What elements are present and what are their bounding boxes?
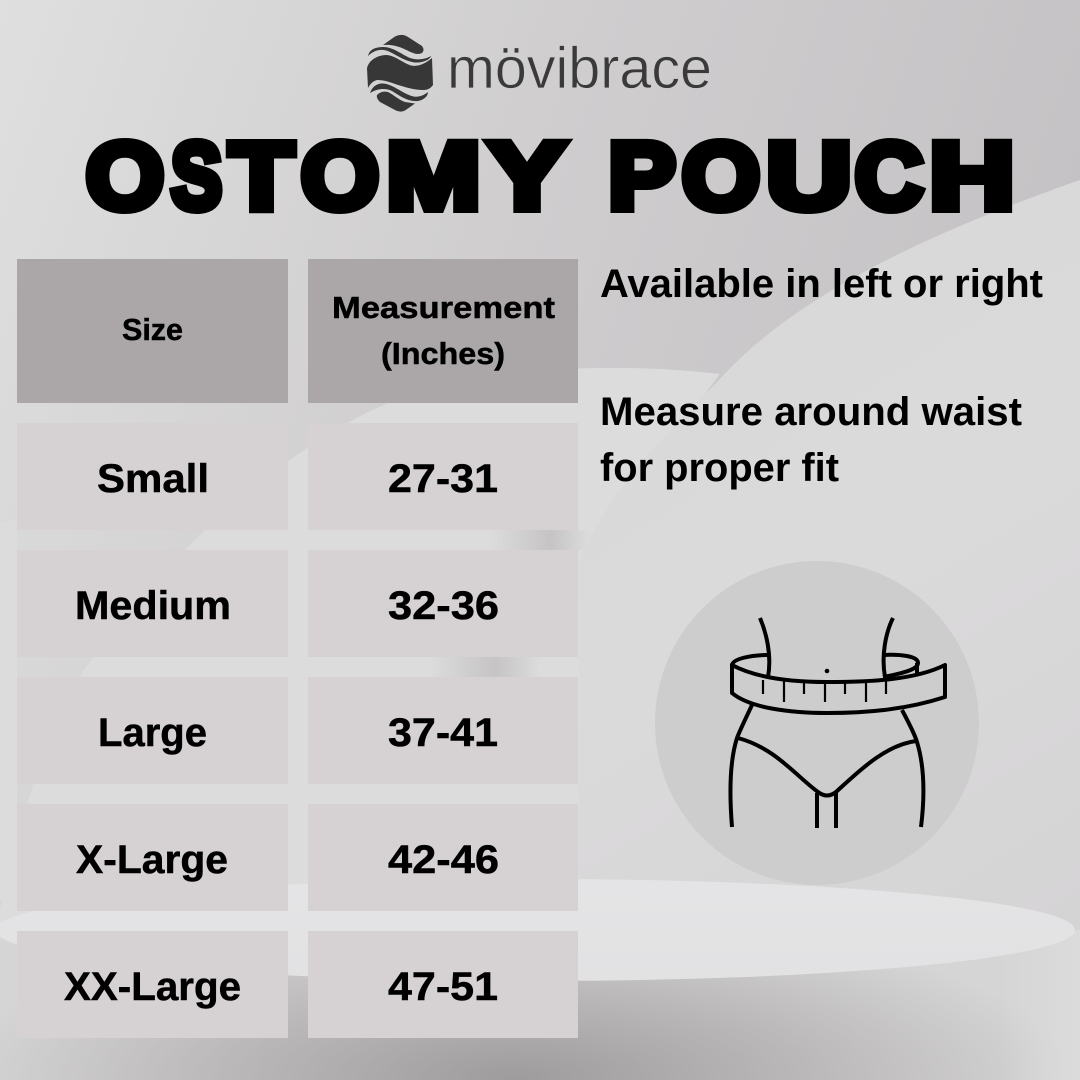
row: xx-large: XX-Large <box>64 965 241 1009</box>
row: x-large <box>17 804 578 911</box>
title: P <box>608 124 676 230</box>
row: small <box>17 423 578 530</box>
header: size <box>17 259 288 403</box>
row: medium <box>17 550 578 657</box>
title: O <box>301 124 379 230</box>
row: x-large: 42-46 <box>388 838 499 882</box>
title: T <box>230 124 294 230</box>
row: x-large: X-Large <box>76 838 228 882</box>
title: C <box>855 124 923 230</box>
header: size: Size <box>122 312 183 347</box>
title: Y <box>488 124 564 230</box>
title: H <box>930 124 1014 230</box>
icon: logo hexagon <box>367 35 433 112</box>
row: small: 27-31 <box>388 457 498 501</box>
row: xx-large <box>17 931 578 1038</box>
row: large: Large <box>98 711 207 755</box>
row: xx-large: 47-51 <box>388 965 498 1009</box>
title: M <box>386 124 480 230</box>
wordmark: mövibrace <box>447 36 712 101</box>
row: medium: 32-36 <box>388 584 499 628</box>
row: large: 37-41 <box>388 711 498 755</box>
note: measuring instructions: Measure around waist <box>600 390 1022 434</box>
title: U <box>766 124 852 230</box>
note: measuring instructions: for proper fit <box>600 446 839 490</box>
header: measurement <box>308 259 578 403</box>
size table <box>17 259 578 1038</box>
row: large <box>17 677 578 784</box>
row: medium: Medium <box>75 584 231 628</box>
note: availability: Available in left or right <box>600 262 1043 306</box>
logo: movibrace <box>367 35 712 112</box>
title: O <box>682 124 760 230</box>
note: measuring instructions <box>600 390 1022 490</box>
title: S <box>171 124 222 230</box>
header: measurement: (Inches) <box>381 336 505 371</box>
icon: waist measurement <box>655 561 979 885</box>
row: small: Small <box>97 457 209 501</box>
title: O <box>86 124 164 230</box>
header: measurement: Measurement <box>332 290 555 325</box>
